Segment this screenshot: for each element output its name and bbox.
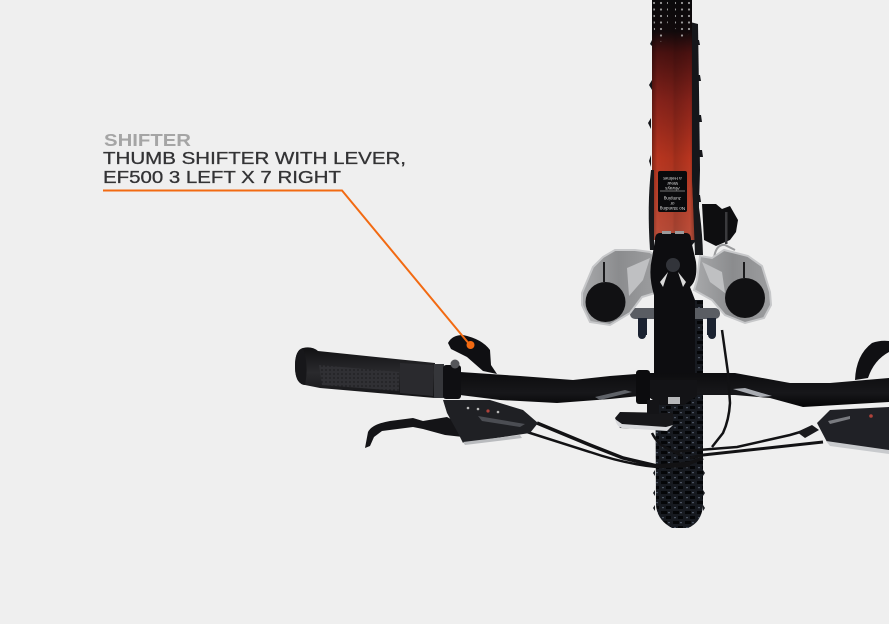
pedals and cables below silver blocks xyxy=(630,308,720,339)
bicycle: top view xyxy=(295,0,889,528)
callout: shifter xyxy=(103,130,474,349)
rear tire behind frame xyxy=(648,22,703,250)
stem xyxy=(650,231,696,382)
warning sticker: Always xyxy=(665,186,680,191)
left silver pedal block xyxy=(582,250,655,325)
right shift unit xyxy=(797,407,889,454)
left shift unit xyxy=(443,400,538,445)
arrow: leader line to shifter xyxy=(103,190,474,349)
callout description xyxy=(103,148,406,187)
right silver pedal block xyxy=(694,250,771,323)
warning sticker: or xyxy=(670,201,675,206)
left brake lever xyxy=(365,417,463,448)
left grip xyxy=(295,347,444,398)
callout heading: SHIFTER xyxy=(104,130,191,150)
warning sticker xyxy=(658,171,687,212)
brake and shifter cables xyxy=(527,330,823,467)
handlebar xyxy=(460,372,889,407)
callout description: THUMB SHIFTER WITH LEVER, xyxy=(103,148,406,168)
frame down tube xyxy=(649,0,703,255)
front reflector xyxy=(615,400,673,431)
infographic canvas xyxy=(103,0,889,528)
thumb shifter lever xyxy=(448,335,497,374)
warning sticker: Jumping xyxy=(663,196,681,201)
warning sticker: No Standing xyxy=(659,206,685,211)
front tire xyxy=(653,300,705,528)
right thumb shifter lever xyxy=(855,341,889,380)
warning sticker: a Helmet xyxy=(663,176,682,181)
left clamp xyxy=(443,360,461,399)
brake caliper right of frame xyxy=(702,204,738,258)
callout description: EF500 3 LEFT X 7 RIGHT xyxy=(103,167,341,187)
warning sticker: Wear xyxy=(667,181,678,186)
stem clamp and bell xyxy=(636,370,697,405)
